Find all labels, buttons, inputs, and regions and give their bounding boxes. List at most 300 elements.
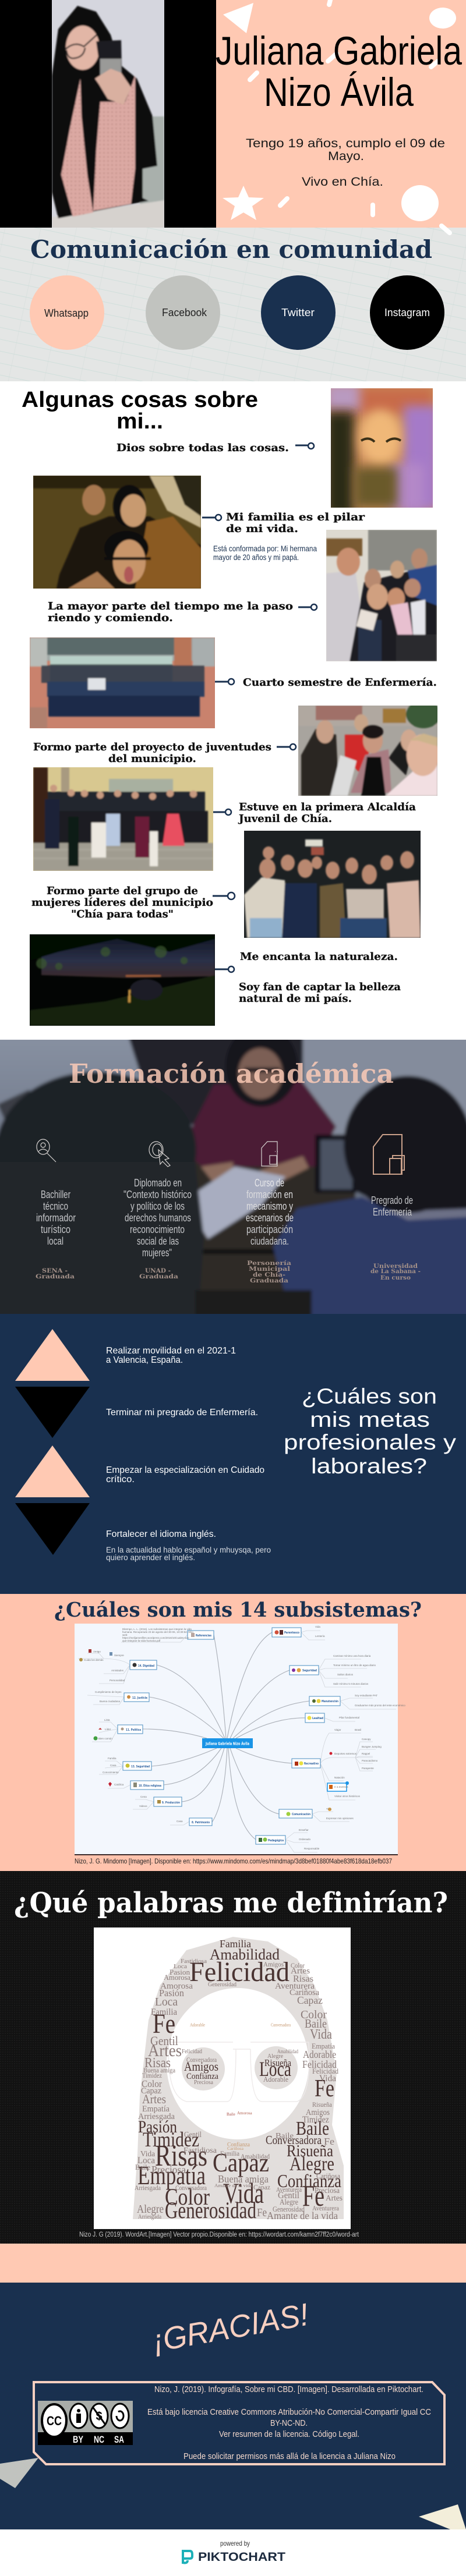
text column: curso: participación bbox=[246, 1224, 293, 1235]
text: naturaleza: natural de mi país. bbox=[239, 993, 352, 1005]
small words: Amabilidad bbox=[241, 2152, 270, 2160]
leaf labels: Paracaidismo bbox=[362, 1759, 378, 1762]
text column: diplomado: Graduada bbox=[139, 1273, 178, 1280]
leaf labels: Canopy bbox=[362, 1738, 371, 1741]
text: licencia: BY-NC-ND. bbox=[270, 2418, 308, 2428]
triangle: cream accent bbox=[419, 2504, 466, 2529]
large words: Pasion bbox=[170, 1968, 190, 1976]
leaf labels: Bien común bbox=[98, 1737, 112, 1740]
large words: Adorable bbox=[303, 2049, 336, 2060]
small words: Adorable bbox=[263, 2075, 288, 2084]
large words: Amabilidad bbox=[210, 1946, 280, 1963]
leaf labels: Ditempo, L. L. (2016). Los subsistemas que integran la vida bbox=[122, 1628, 192, 1631]
text: mujeres líderes bbox=[31, 885, 213, 920]
panel: gracias y licencia bbox=[0, 2283, 466, 2529]
text: Dios: Dios sobre todas las cosas. bbox=[116, 442, 289, 454]
small words: Buena amiga bbox=[218, 2173, 269, 2185]
connector: juventudes bbox=[277, 744, 296, 750]
leaf labels: Natación bbox=[334, 1776, 345, 1779]
leaf labels: que-integran-la-vida-humana.pdf bbox=[122, 1639, 161, 1642]
large words: Amigos bbox=[263, 1960, 284, 1968]
text column: pregrado bbox=[370, 1195, 421, 1281]
large words: Conversadora bbox=[266, 2133, 322, 2147]
text column: curso: formación en bbox=[246, 1189, 293, 1200]
heading: metas: laborales? bbox=[311, 1454, 427, 1478]
text: juventudes: del municipio. bbox=[108, 753, 196, 765]
heading: Formación académica bbox=[69, 1058, 394, 1089]
text column: pregrado: Pregrado de bbox=[371, 1195, 413, 1206]
icon: cursor target bbox=[149, 1142, 170, 1167]
large words: Fe bbox=[153, 2008, 175, 2039]
large words: Capaz bbox=[141, 2086, 161, 2096]
leaf labels: Visitar otros históricos bbox=[334, 1795, 361, 1798]
text column: bachiller: técnico bbox=[43, 1200, 68, 1212]
node labels: 9. Producción bbox=[162, 1801, 180, 1805]
text: riendo y comiendo: riendo y comiendo. bbox=[48, 612, 173, 624]
goal 4: Fortalecer el idioma inglés. bbox=[106, 1529, 216, 1539]
photo: rostro de Jesús bbox=[331, 388, 433, 508]
decorative confetti shapes bbox=[223, 0, 456, 233]
large words: Generosidad bbox=[208, 1982, 236, 1988]
text: alcaldía bbox=[238, 801, 416, 825]
circle: Whatsapp bbox=[30, 275, 104, 350]
text column: curso: de Chía- bbox=[253, 1271, 285, 1278]
large words: Aventurera bbox=[275, 1982, 315, 1991]
small words: Cariñosa bbox=[227, 2146, 244, 2151]
text column: bachiller: local bbox=[47, 1235, 63, 1247]
circle: Twitter bbox=[261, 275, 336, 350]
small words: Conversadora bbox=[186, 2056, 217, 2064]
large words: Pasión bbox=[138, 2117, 177, 2136]
word cloud portrait bbox=[94, 1927, 351, 2229]
text column: pregrado: Enfermería bbox=[373, 1206, 412, 1218]
leaf labels: Casa bbox=[176, 1820, 183, 1823]
text: naturaleza bbox=[239, 951, 401, 1005]
heading: Comunicación en comunidad bbox=[30, 235, 432, 264]
icon: magnifier person bbox=[37, 1139, 56, 1162]
heading: metas: mis metas bbox=[310, 1408, 430, 1431]
large words: Capaz bbox=[297, 1994, 323, 2006]
text column: diplomado: Diplomado en bbox=[134, 1177, 182, 1189]
text column: bachiller: SENA - bbox=[42, 1267, 68, 1274]
leaf labels: Rappel bbox=[362, 1752, 370, 1755]
node icons bbox=[79, 1630, 349, 1842]
leaf labels: Soy estudiante PAT bbox=[355, 1694, 377, 1697]
mind map bbox=[75, 1624, 405, 1855]
panel: palabras bbox=[0, 1871, 466, 2244]
small words: Adorable bbox=[190, 2022, 205, 2028]
small words: Cariñosa bbox=[316, 2171, 340, 2180]
leaf labels bbox=[84, 1625, 405, 1850]
small words: Felicidad bbox=[182, 2049, 202, 2055]
title: name bbox=[216, 29, 463, 115]
text: licencia: Está bajo licencia Creative Commons Atribución-No Comercial-Compartir Igual CC bbox=[147, 2407, 431, 2417]
photo: alcaldía juvenil bbox=[33, 767, 213, 871]
heading: mi... bbox=[116, 409, 163, 434]
large words: Felicidad bbox=[312, 2067, 338, 2075]
icon: document peach bbox=[373, 1135, 404, 1174]
circle: Facebook: Facebook bbox=[162, 307, 207, 318]
text column: bachiller: Graduada bbox=[36, 1273, 75, 1280]
left nodes bbox=[118, 1628, 347, 1844]
leaf labels: Conocimiento bbox=[103, 1771, 119, 1774]
small words: Fe bbox=[257, 2206, 267, 2219]
icon: piktochart logo bbox=[183, 2551, 192, 2564]
small words: Alegre bbox=[280, 2198, 298, 2207]
large words: Amorosa bbox=[160, 1982, 193, 1991]
small words: Fe bbox=[324, 2136, 334, 2147]
small words: Confianza bbox=[227, 2142, 250, 2148]
large words: Fastidiosa bbox=[181, 1958, 207, 1965]
goal 3 bbox=[106, 1465, 264, 1484]
node labels: Lealtad bbox=[312, 1717, 323, 1720]
footer: powered by piktochart: powered by bbox=[220, 2539, 250, 2547]
goal 3: crítico. bbox=[106, 1475, 135, 1484]
leaf labels: Amistades bbox=[111, 1669, 124, 1672]
large words: Empatía bbox=[137, 2160, 206, 2190]
text column: curso: Personería bbox=[247, 1260, 291, 1267]
large words: Artes bbox=[291, 1966, 310, 1976]
large words: Loca bbox=[174, 1963, 187, 1970]
triangle: grey accent bbox=[0, 2458, 38, 2488]
icon: cc badge: CC bbox=[47, 2414, 62, 2428]
icon: cc badge: $ bbox=[96, 2410, 103, 2423]
leaf labels: Lentería bbox=[315, 1635, 325, 1638]
heading: metas bbox=[284, 1384, 457, 1478]
heading bbox=[22, 388, 258, 434]
heading: ¿Qué palabras me definirían? bbox=[14, 1887, 448, 1919]
text column: curso: Graduada bbox=[250, 1277, 288, 1284]
large words: Amorosa bbox=[164, 1973, 190, 1982]
large words: Alegre bbox=[137, 2203, 164, 2216]
leaf branches bbox=[78, 1631, 396, 1852]
large words: Color bbox=[142, 2078, 162, 2089]
large words: Artes bbox=[148, 2041, 182, 2060]
leaf labels: Líder bbox=[105, 1728, 111, 1731]
triangle marker 4 bbox=[15, 1503, 90, 1555]
panel: comunicación en comunidad bbox=[0, 226, 466, 381]
leaf labels: Tíos bbox=[326, 1808, 332, 1810]
small words: Aventurera bbox=[276, 2185, 302, 2194]
large words: Amante de la vida bbox=[267, 2210, 338, 2221]
large words: Cariñosa bbox=[290, 1988, 319, 1997]
node labels: 13. Seguridad bbox=[131, 1765, 150, 1769]
text: licencia: Puede solicitar permisos más allá de la licencia a Juliana Nizo bbox=[183, 2451, 396, 2461]
text: riendo y comiendo bbox=[48, 600, 293, 624]
text: mujeres líderes: Formo parte del grupo de bbox=[47, 885, 198, 897]
footer: powered by piktochart bbox=[0, 2529, 466, 2576]
panel: formación académica bbox=[0, 1025, 466, 1320]
text column: diplomado bbox=[123, 1177, 192, 1280]
goal 3: Empezar la especialización en Cuidado bbox=[106, 1465, 264, 1475]
text: licencia bbox=[147, 2384, 431, 2461]
text column: pregrado: Universidad bbox=[373, 1263, 418, 1270]
large words: Fe bbox=[315, 2075, 334, 2102]
caption: wordart: Nizo J. G (2019). WordArt.[Imagen] Vector propio.Disponible en: https://wordart.com/kamn2f7ff2c0/word-art bbox=[79, 2231, 359, 2238]
small words: Confianza bbox=[186, 2072, 218, 2081]
text column: bachiller: informador bbox=[36, 1212, 76, 1224]
large words: Alegre bbox=[290, 2153, 334, 2175]
text column: bachiller: turístico bbox=[41, 1224, 70, 1235]
small words: Arriesgada bbox=[138, 2213, 161, 2220]
text: familia detalle bbox=[213, 544, 317, 562]
heading: ¿Cuáles son mis 14 subsistemas? bbox=[54, 1598, 422, 1622]
text: juventudes: Formo parte del proyecto de juventudes bbox=[33, 741, 271, 753]
leaf labels: Cena bbox=[140, 1795, 147, 1798]
text column: diplomado: reconocimiento bbox=[130, 1224, 185, 1235]
leaf labels: Vida bbox=[315, 1625, 320, 1628]
large words: Baile bbox=[305, 2017, 327, 2031]
title: name: Nizo Ávila bbox=[264, 70, 414, 115]
small words: Preciosa bbox=[194, 2079, 214, 2086]
panel: subsistemas bbox=[0, 1594, 466, 1871]
connector: naturaleza bbox=[215, 966, 234, 972]
small words: Alegre bbox=[267, 2053, 284, 2060]
small words: Capaz bbox=[253, 2183, 270, 2191]
central node: Juliana Gabriela Nizo Ávila bbox=[205, 1741, 249, 1746]
small words: Aventurera bbox=[312, 2204, 340, 2212]
photo: juventudes bbox=[298, 706, 437, 796]
large words: Risueña bbox=[312, 2100, 333, 2109]
photo: mujeres líderes bbox=[244, 831, 421, 938]
leaf labels: Personalidad bbox=[110, 1679, 125, 1682]
large words: Color bbox=[165, 2184, 210, 2210]
text column: diplomado: y político de los bbox=[130, 1200, 185, 1212]
header panel: name and age bbox=[216, 0, 466, 233]
triangle marker 1 bbox=[15, 1329, 90, 1381]
large words: Amigos bbox=[306, 2108, 330, 2117]
leaf labels: Ir a eventos bbox=[334, 1785, 348, 1788]
small words: Amorosa bbox=[237, 2111, 253, 2116]
leaf labels: Saltos diarios bbox=[337, 1673, 354, 1676]
text column: diplomado: mujeres" bbox=[142, 1247, 172, 1259]
text column: curso: Curso de bbox=[255, 1177, 284, 1189]
leaf labels: Viajar bbox=[334, 1728, 341, 1731]
small words: Generosidad bbox=[273, 2205, 305, 2213]
large words: Empatía bbox=[142, 2104, 170, 2114]
text column: curso: mecanismo y bbox=[246, 1200, 293, 1212]
small words: Preciosa bbox=[315, 2187, 340, 2195]
text: enfermería: Cuarto semestre de Enfermería. bbox=[243, 676, 437, 689]
node labels: Seguridad bbox=[302, 1669, 317, 1673]
large words: Risueña bbox=[287, 2142, 333, 2160]
central node bbox=[202, 1738, 253, 1748]
leaf labels: Familia bbox=[108, 1757, 116, 1760]
large words: Timidez bbox=[143, 2128, 199, 2151]
large words: Timidez bbox=[302, 2115, 329, 2125]
large words: Generosidad bbox=[165, 2197, 256, 2223]
large words: Timidez bbox=[142, 2071, 162, 2079]
small words: Baile bbox=[135, 2163, 150, 2171]
icon: document bbox=[262, 1142, 278, 1166]
small words: Amabilidad bbox=[277, 2049, 298, 2054]
panel: metas profesionales bbox=[0, 1314, 466, 1594]
photo: enfermería bbox=[30, 637, 215, 728]
text column: pregrado: En curso bbox=[380, 1274, 411, 1281]
icon: cc badge: SA bbox=[114, 2434, 124, 2445]
background photo bbox=[0, 1040, 466, 1314]
leaf labels: Cuida los demás bbox=[84, 1659, 104, 1661]
leaf labels: Graduarme más pronto del ente económico bbox=[355, 1704, 405, 1707]
circle: Twitter: Twitter bbox=[281, 307, 315, 318]
mind map branches bbox=[143, 1632, 309, 1840]
text column: curso: escenarios de bbox=[246, 1212, 294, 1224]
text: familia detalle: Está conformada por: Mi hermana bbox=[213, 544, 317, 553]
leaf labels: humana. Recuperado 23 de agosto del 30-06, 10:30:54. Sitio bbox=[122, 1631, 193, 1634]
text: naturaleza: Me encanta la naturaleza. bbox=[240, 951, 398, 963]
goal 1 bbox=[106, 1346, 236, 1365]
large words: Capaz bbox=[213, 2148, 269, 2177]
text column: diplomado: derechos humanos bbox=[125, 1212, 191, 1224]
goal 1: a Valencia, España. bbox=[106, 1355, 183, 1365]
text: licencia: Ver resumen de la licencia. Código Legal. bbox=[219, 2429, 359, 2439]
leaf labels: Parapente bbox=[362, 1767, 374, 1770]
photo: familia bbox=[33, 476, 201, 589]
large words: Fe bbox=[302, 2180, 324, 2213]
goal 4 bbox=[106, 1529, 271, 1562]
small words bbox=[135, 2022, 343, 2220]
connector: familia bbox=[202, 515, 221, 520]
leaf labels: Ordenado bbox=[299, 1838, 311, 1841]
leaf labels: Cumplimiento de leyes bbox=[95, 1691, 122, 1693]
text: age and city: Tengo 19 años, cumplo el 09 de bbox=[246, 137, 445, 150]
text column: diplomado: "Contexto histórico bbox=[123, 1189, 192, 1200]
text: familia bbox=[226, 511, 365, 535]
text column: curso: Municipal bbox=[249, 1266, 290, 1273]
photo: familia numerosa bbox=[326, 530, 437, 661]
text: familia detalle: mayor de 20 años y mi papá. bbox=[213, 552, 299, 562]
circle: Instagram bbox=[370, 275, 444, 350]
leaf labels: Buena ciudadana bbox=[100, 1700, 121, 1703]
footer: powered by piktochart: PIKTOCHART bbox=[198, 2550, 285, 2564]
node labels: 12. Justicia bbox=[132, 1696, 147, 1700]
leaf labels: Brasil bbox=[355, 1728, 361, 1731]
small words: Baile bbox=[276, 2132, 294, 2141]
leaf labels: Bungee Jumping bbox=[362, 1745, 382, 1748]
triangle marker 2 bbox=[15, 1387, 90, 1438]
leaf labels: Lista bbox=[104, 1718, 110, 1721]
large words: Baile bbox=[296, 2118, 329, 2139]
text: naturaleza: Soy fan de captar la belleza bbox=[239, 981, 401, 993]
leaf labels: Enseñar bbox=[299, 1829, 309, 1831]
large words: Familia bbox=[220, 1938, 251, 1950]
leaf labels: Pilar fundamental bbox=[339, 1716, 359, 1719]
connector: riendo bbox=[298, 604, 317, 610]
text: juventudes bbox=[33, 741, 271, 765]
large words: Risas bbox=[144, 2056, 171, 2071]
leaf labels: Expresar mis opiniones bbox=[326, 1817, 354, 1820]
text column: diplomado: UNAD - bbox=[145, 1267, 171, 1274]
text: alcaldía: Juvenil de Chía. bbox=[238, 813, 332, 825]
icon: cc badge: BY bbox=[73, 2434, 83, 2445]
connector: alcaldía bbox=[213, 809, 231, 815]
text column: diplomado: social de las bbox=[137, 1235, 179, 1247]
header photo: selfie portrait bbox=[0, 0, 216, 229]
leaf labels: Deportes extremos bbox=[334, 1752, 357, 1755]
text column: pregrado: de La Sabana - bbox=[370, 1268, 421, 1275]
triangle marker 3 bbox=[15, 1445, 90, 1497]
large words: Color bbox=[301, 2008, 327, 2021]
leaf labels: Católica bbox=[114, 1783, 124, 1786]
large words: Risas bbox=[155, 2139, 207, 2173]
text: riendo y comiendo: La mayor parte del tiempo me la paso bbox=[48, 600, 293, 612]
leaf labels: Siempre bbox=[114, 1654, 124, 1657]
node labels: Referencias bbox=[196, 1634, 211, 1638]
icon: cc badge: NC bbox=[94, 2434, 104, 2445]
icon: cc badge bbox=[38, 2401, 133, 2445]
large words: Vida bbox=[319, 2074, 336, 2084]
text: mujeres líderes: mujeres líderes del municipio bbox=[31, 897, 213, 909]
large words: Color bbox=[291, 1961, 305, 1969]
text: familia: Mi familia es el pilar bbox=[226, 511, 365, 523]
node labels: 8. Patrimonio bbox=[192, 1821, 210, 1824]
small words: Fastidiosa bbox=[183, 2146, 217, 2155]
heading: Algunas cosas sobre bbox=[22, 388, 258, 412]
small words: Gentil bbox=[278, 2191, 300, 2201]
goal 4: En la actualidad hablo español y mhuysqa, pero bbox=[106, 1545, 271, 1554]
large words: Arriesgada bbox=[138, 2112, 175, 2121]
text column: curso bbox=[246, 1177, 294, 1284]
node labels: 11. Política bbox=[126, 1728, 141, 1732]
small words: Conversadora bbox=[175, 2184, 207, 2192]
leaf labels: Casa bbox=[110, 1764, 116, 1767]
text: alcaldía: Estuve en la primera Alcaldía bbox=[239, 801, 416, 813]
small words: Loca bbox=[259, 2057, 291, 2081]
small words: Vida bbox=[140, 2150, 156, 2159]
small words: Amante de la vida bbox=[214, 2183, 252, 2188]
small words: Artes bbox=[326, 2194, 343, 2203]
small words: Baile bbox=[227, 2112, 235, 2117]
leaf labels: Tomar mínimo un litro de agua diario bbox=[333, 1664, 376, 1667]
caption: mindomo: Nizo, J. G. Mindomo [Imagen]. Disponible en: https://www.mindomo.com/es/mindmap/3d8bef01880f4abe83f618da18efb037 bbox=[75, 1857, 392, 1865]
node labels: Comunicación bbox=[292, 1812, 310, 1816]
node labels: Recreativo bbox=[304, 1762, 319, 1766]
node labels: Manutención bbox=[322, 1699, 338, 1703]
band: peach spacer bbox=[0, 2244, 466, 2283]
connector: mujeres bbox=[213, 892, 235, 899]
license frame bbox=[34, 2382, 444, 2464]
circle: Facebook bbox=[146, 275, 220, 350]
large words bbox=[137, 1938, 341, 2223]
large words: Vida bbox=[223, 2177, 264, 2209]
small words: Familia bbox=[220, 2149, 240, 2157]
small words: Arriesgada bbox=[135, 2184, 161, 2192]
large words: Gentil bbox=[150, 2033, 178, 2048]
small words: Preciosa bbox=[151, 2164, 186, 2175]
text: familia: de mi vida. bbox=[226, 523, 298, 535]
connector: Dios bbox=[295, 443, 314, 449]
text: licencia: Nizo, J. (2019). Infografía, Sobre mi CBD. [Imagen]. Desarrollada en Piktochart. bbox=[154, 2384, 423, 2394]
heading: metas: profesionales y bbox=[284, 1430, 457, 1454]
large words: Pasión bbox=[159, 1987, 184, 1999]
heading: metas: ¿Cuáles son bbox=[302, 1384, 437, 1408]
goal 2: Terminar mi pregrado de Enfermería. bbox=[106, 1408, 258, 1418]
large words: Confianza bbox=[277, 2170, 341, 2191]
small words: Risueña bbox=[264, 2057, 291, 2068]
text: age and city: Mayo. bbox=[328, 150, 364, 163]
large words: Vida bbox=[310, 2027, 332, 2042]
small words: Conversadora bbox=[271, 2022, 291, 2028]
text column: bachiller: Bachiller bbox=[41, 1189, 70, 1200]
large words: Risas bbox=[293, 1974, 313, 1984]
leaf labels: Amigo bbox=[93, 1650, 101, 1653]
goal 1: Realizar movilidad en el 2021-1 bbox=[106, 1346, 236, 1356]
small words: Loca bbox=[137, 2156, 155, 2166]
large words: Familia bbox=[151, 2007, 177, 2017]
node labels: 14. Dignidad bbox=[138, 1664, 154, 1668]
leaf labels: Salir mínimo 5 minutos diarios bbox=[333, 1682, 369, 1685]
leaf labels: web: bbox=[122, 1634, 128, 1636]
